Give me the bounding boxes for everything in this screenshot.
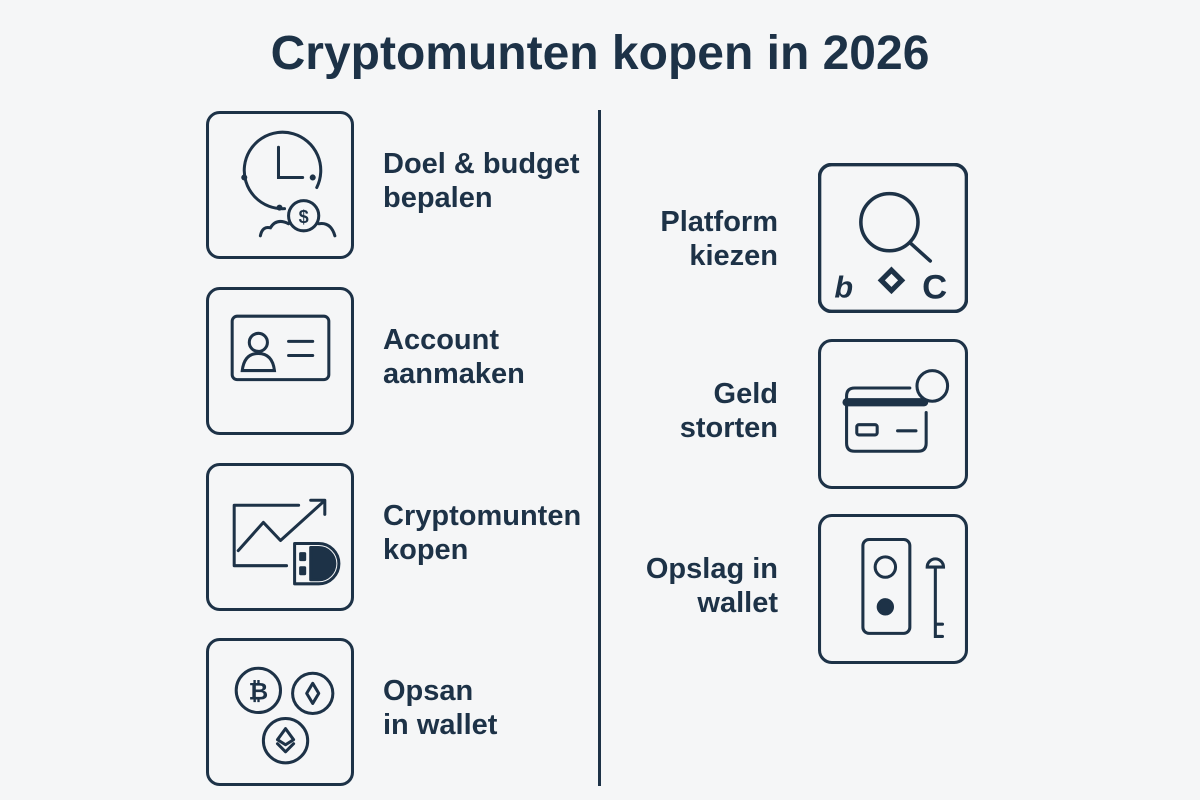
label: Geld <box>714 378 778 410</box>
label: Opsan <box>383 675 473 707</box>
step: geld storten <box>680 339 968 489</box>
label: Doel & budget <box>383 148 580 180</box>
label: in wallet <box>383 709 497 741</box>
label: aanmaken <box>383 358 525 390</box>
label <box>660 206 778 272</box>
label: bepalen <box>383 182 493 214</box>
icon: hardware wallet and key <box>818 514 968 664</box>
label: kopen <box>383 534 468 566</box>
label: wallet <box>697 587 778 619</box>
label: Account <box>383 324 499 356</box>
label <box>383 324 525 390</box>
icon: clock with coin <box>206 111 354 259</box>
label: kiezen <box>689 240 778 272</box>
step: opsan in wallet <box>206 638 498 786</box>
label: Opslag in <box>646 553 778 585</box>
icon: magnifier with exchange logos <box>818 163 968 313</box>
label <box>646 553 778 619</box>
step: account aanmaken <box>206 287 525 435</box>
step: cryptomunten kopen <box>206 463 581 611</box>
label <box>383 148 580 214</box>
icon: card with coin <box>818 339 968 489</box>
icon: coins: ₿ <box>249 678 268 705</box>
icon: clock with coin: $ <box>299 207 309 227</box>
step: opslag in wallet <box>646 514 968 664</box>
label: Platform <box>660 206 778 238</box>
divider <box>598 110 601 786</box>
label <box>383 500 581 566</box>
icon: magnifier with exchange logos: b <box>834 271 853 305</box>
icon: coins <box>206 638 354 786</box>
label: Cryptomunten <box>383 500 581 532</box>
icon: id card <box>206 287 354 435</box>
step: doel & budget <box>206 111 580 259</box>
step: platform kiezen <box>660 163 968 313</box>
label: storten <box>680 412 778 444</box>
label <box>383 675 498 741</box>
label <box>680 378 778 444</box>
icon: magnifier with exchange logos: C <box>922 269 947 307</box>
icon: chart with wallet <box>206 463 354 611</box>
title: Cryptomunten kopen in 2026 <box>271 27 929 80</box>
